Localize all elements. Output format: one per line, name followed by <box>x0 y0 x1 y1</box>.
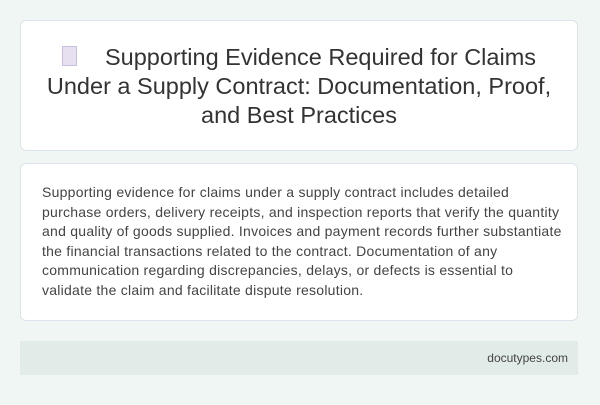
body text: Supporting evidence for claims under a supply contract includes detailed <box>42 184 509 200</box>
description panel <box>20 163 578 321</box>
footer <box>20 341 578 375</box>
body text: the financial transactions related to the contract. Documentation of any <box>42 243 497 259</box>
body text: communication regarding discrepancies, delays, or defects is essential to <box>42 262 513 278</box>
body text: validate the claim and facilitate dispute resolution. <box>42 282 363 298</box>
title panel <box>20 20 578 151</box>
footer text: docutypes.com <box>487 351 568 365</box>
body text <box>42 184 562 298</box>
icon: receipt <box>62 46 77 66</box>
body text: purchase orders, delivery receipts, and inspection reports that verify the quantity <box>42 204 559 220</box>
title: Supporting Evidence Required for Claims Under a Supply Contract: Documentation, Proof, and Best Practices <box>47 44 551 128</box>
body text: and quality of goods supplied. Invoices and payment records further substantiate <box>42 223 562 239</box>
